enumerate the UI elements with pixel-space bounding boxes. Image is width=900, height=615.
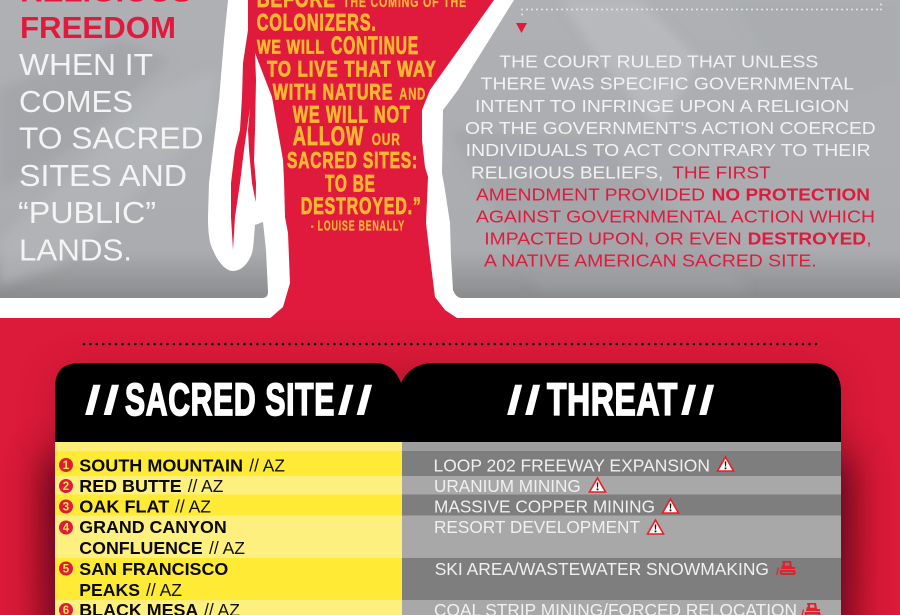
- quote: Louise Benally: ALLOW: [293, 121, 364, 151]
- row 4: Grand Canyon Confluence: GRAND CANYON: [79, 517, 227, 537]
- quote: Louise Benally: COLONIZERS.: [257, 10, 377, 37]
- heading: left statement: SITES AND: [19, 158, 187, 193]
- table header: //: [85, 379, 122, 423]
- dotted connector and arrow: [516, 0, 881, 33]
- red lower field: [0, 318, 900, 615]
- heading: left statement: [18, 0, 204, 268]
- heading: left statement: COMES: [19, 84, 133, 119]
- row 3: Oak Flat: MASSIVE COPPER MINING: [434, 497, 655, 517]
- row 4: Grand Canyon Confluence: 4: [63, 522, 70, 534]
- quote: Louise Benally: AND: [399, 85, 426, 103]
- text block: court ruling: INTENT TO INFRINGE UPON A RELIGION: [475, 96, 849, 116]
- row 1: South Mountain: // AZ: [249, 456, 285, 476]
- quote: Louise Benally: DESTROYED.”: [301, 193, 422, 220]
- table header: //: [507, 379, 543, 423]
- heading: left statement: “PUBLIC”: [18, 195, 156, 230]
- row 2: Red Butte: // AZ: [188, 476, 224, 496]
- row 3: Oak Flat: 3: [63, 502, 69, 514]
- quote: Louise Benally: [257, 0, 467, 235]
- text block: court ruling: AMENDMENT PROVIDED: [476, 184, 705, 204]
- table: sacred sites and threats: [55, 363, 841, 615]
- row 5: San Francisco Peaks: // AZ: [146, 580, 182, 600]
- row 3: Oak Flat: // AZ: [175, 497, 211, 517]
- table header: [55, 363, 841, 443]
- heading: left statement: WHEN IT: [19, 47, 153, 82]
- row 3: Oak Flat: OAK FLAT: [79, 497, 170, 517]
- row 1: South Mountain: SOUTH MOUNTAIN: [79, 456, 243, 476]
- text block: court ruling: THE FIRST: [672, 162, 771, 182]
- text block: court ruling: DESTROYED: [748, 229, 866, 249]
- quote: Louise Benally: WE WILL: [257, 38, 325, 59]
- text block: court ruling: IMPACTED UPON, OR EVEN: [484, 229, 742, 249]
- row 4: Grand Canyon Confluence: // AZ: [209, 538, 245, 558]
- quote: Louise Benally: - LOUISE BENALLY: [311, 219, 405, 235]
- heading: left statement: TO SACRED: [19, 120, 204, 156]
- quote: Louise Benally: CONTINUE: [331, 32, 419, 60]
- text block: court ruling: AGAINST GOVERNMENTAL ACTION WHICH: [476, 206, 875, 226]
- heading: left statement: FREEDOM: [20, 10, 176, 45]
- row 2: Red Butte: [59, 476, 606, 496]
- row 4: Grand Canyon Confluence: CONFLUENCE: [79, 538, 203, 558]
- heading: left statement: LANDS.: [19, 232, 132, 268]
- row 5: San Francisco Peaks: 5: [63, 564, 70, 576]
- text block: court ruling: THE COURT RULED THAT UNLESS: [499, 52, 818, 72]
- row 6: Black Mesa: [59, 600, 820, 615]
- row 4: Grand Canyon Confluence: [59, 517, 664, 558]
- quote: Louise Benally: WE WILL NOT: [293, 102, 411, 129]
- row 2: Red Butte: RED BUTTE: [79, 476, 182, 496]
- text block: court ruling: ,: [866, 229, 871, 249]
- table header: //: [338, 379, 375, 423]
- quote: Louise Benally: WITH NATURE: [273, 79, 393, 104]
- text block: court ruling: [465, 52, 876, 271]
- threat column backgrounds: [402, 442, 841, 615]
- row 1: South Mountain: LOOP 202 FREEWAY EXPANSION: [434, 456, 710, 476]
- row 2: Red Butte: URANIUM MINING: [434, 476, 581, 496]
- sacred site column backgrounds: [55, 442, 402, 615]
- row 3: Oak Flat: [59, 497, 678, 517]
- quote: Louise Benally: TO BE: [325, 171, 376, 198]
- quote: Louise Benally: TO LIVE THAT WAY: [267, 57, 437, 82]
- row 5: San Francisco Peaks: SAN FRANCISCO: [79, 559, 228, 579]
- row 4: Grand Canyon Confluence: RESORT DEVELOPMENT: [434, 517, 640, 537]
- text block: court ruling: INDIVIDUALS TO ACT CONTRARY TO THEIR: [466, 140, 871, 160]
- row 2: Red Butte: 2: [63, 481, 69, 493]
- quote: Louise Benally: SACRED SITES:: [287, 147, 418, 173]
- row 1: South Mountain: 1: [63, 460, 70, 472]
- text block: court ruling: OR THE GOVERNMENT'S ACTION COERCED: [465, 118, 876, 138]
- text block: court ruling: A NATIVE AMERICAN SACRED SITE.: [484, 251, 817, 271]
- row 5: San Francisco Peaks: [59, 559, 796, 600]
- text block: court ruling: RELIGIOUS BELIEFS,: [471, 162, 663, 182]
- red head and braid silhouette: [231, 0, 494, 320]
- row 5: San Francisco Peaks: PEAKS: [79, 580, 140, 600]
- text block: court ruling: NO PROTECTION: [712, 184, 870, 204]
- white silhouette band and border: [0, 0, 900, 320]
- table header: THREAT: [547, 374, 678, 425]
- quote: Louise Benally: OUR: [372, 130, 401, 149]
- text block: court ruling: THERE WAS SPECIFIC GOVERNMENTAL: [481, 74, 854, 94]
- row 5: San Francisco Peaks: SKI AREA/WASTEWATER SNOWMAKING: [435, 559, 769, 579]
- dotted divider: [84, 343, 818, 345]
- row 1: South Mountain: [59, 456, 734, 476]
- table header: //: [681, 379, 717, 423]
- background: grey upper field: [0, 0, 900, 298]
- table header: SACRED SITE: [125, 374, 335, 425]
